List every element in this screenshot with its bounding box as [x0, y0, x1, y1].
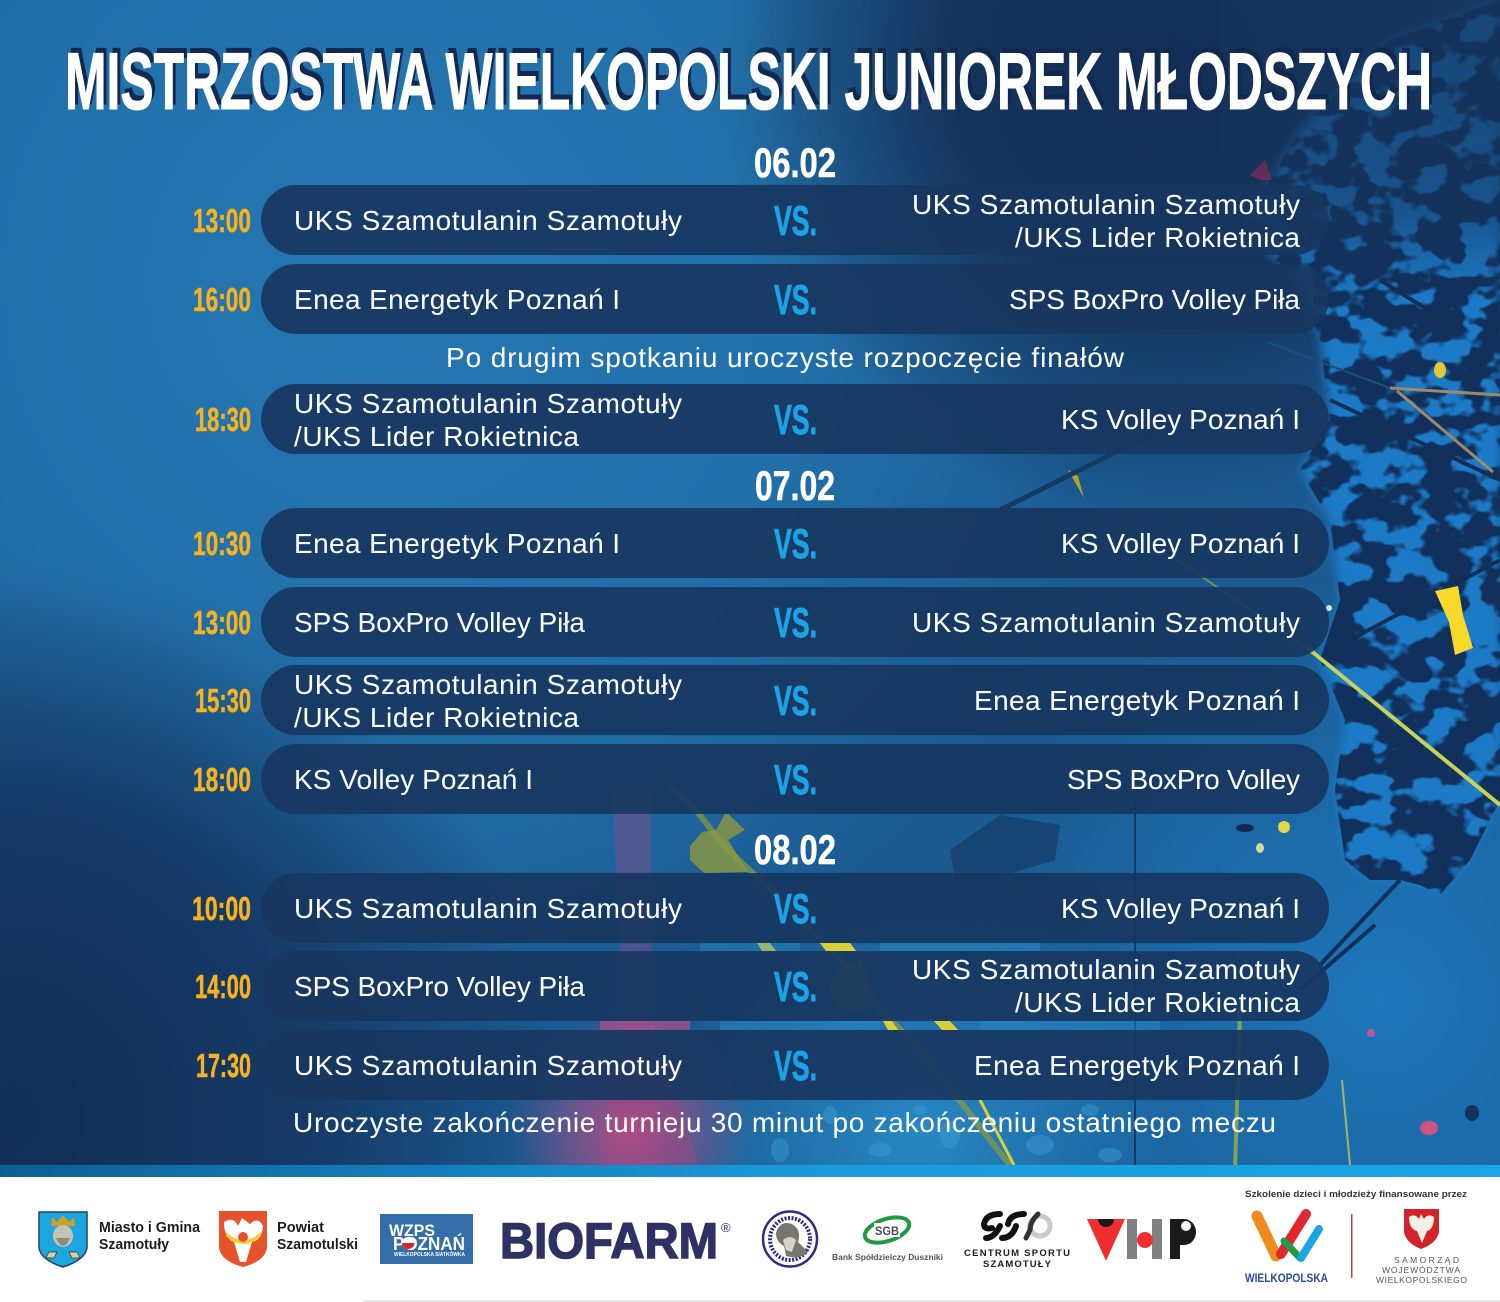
- footer sponsor band: [0, 1165, 1500, 1302]
- logo: Centrum Sportu Szamotuły: CENTRUM SPORTU: [964, 1248, 1070, 1259]
- date heading 06.02: 06.02: [754, 139, 836, 186]
- match row: 06.02 13:00: UKS Szamotulanin Szamotuły: [912, 189, 1300, 220]
- logo: VHP: [1087, 1219, 1196, 1261]
- logo: Miasto i Gmina Szamotuły: Szamotuły: [99, 1237, 169, 1253]
- date heading 08.02: 08.02: [754, 826, 836, 873]
- logo: WZPS Poznań: WZPS: [389, 1221, 435, 1240]
- logo: Samorząd Województwa Wielkopolskiego: [1351, 1209, 1467, 1285]
- logo: Biofarm: BIOFARM: [500, 1213, 718, 1269]
- match row: 07.02 18:00: KS Volley Poznań I: [294, 764, 533, 795]
- match row: 06.02 18:30: 18:30: [195, 401, 251, 438]
- match row: 06.02 13:00: [193, 185, 1329, 255]
- logo: WZPS Poznań: [380, 1214, 473, 1264]
- match row: 06.02 16:00: SPS BoxPro Volley Piła: [1009, 284, 1300, 315]
- logo: Biofarm: ®: [721, 1220, 731, 1235]
- match row: 08.02 17:30: 17:30: [196, 1047, 251, 1084]
- match row: 06.02 16:00: [193, 264, 1329, 334]
- match row: 07.02 15:30: VS.: [774, 677, 817, 724]
- match row: 07.02 10:30: VS.: [774, 520, 817, 567]
- match row: 07.02 10:30: [193, 508, 1329, 578]
- match row: 08.02 17:30: VS.: [774, 1042, 817, 1089]
- match row: 06.02 13:00: /UKS Lider Rokietnica: [1015, 222, 1300, 253]
- logo: Powiat Szamotulski: Powiat: [277, 1220, 324, 1236]
- match row: 07.02 15:30: Enea Energetyk Poznań I: [974, 685, 1300, 716]
- logo: Centrum Sportu Szamotuły: [964, 1214, 1070, 1270]
- logo: SGB Bank Spółdzielczy Duszniki: [832, 1212, 943, 1262]
- match row: 07.02 10:30: Enea Energetyk Poznań I: [294, 528, 620, 559]
- background: ink splatter on the right: [1177, 0, 1500, 990]
- match row: 06.02 18:30: VS.: [774, 396, 817, 443]
- match row: 08.02 10:00: VS.: [774, 885, 817, 932]
- logo: SGB Bank Spółdzielczy Duszniki: SGB: [875, 1224, 899, 1238]
- match row: 07.02 15:30: [195, 665, 1329, 735]
- match row: 06.02 13:00: UKS Szamotulanin Szamotuły: [294, 205, 682, 236]
- match row: 06.02 18:30: UKS Szamotulanin Szamotuły: [294, 388, 682, 419]
- match row: 07.02 13:00: UKS Szamotulanin Szamotuły: [912, 607, 1300, 638]
- match row: 07.02 13:00: [193, 587, 1329, 657]
- match row: 08.02 10:00: KS Volley Poznań I: [1061, 893, 1300, 924]
- logo: school medallion: [763, 1212, 817, 1266]
- logo: Wielkopolska: WIELKOPOLSKA: [1245, 1271, 1328, 1285]
- match row: 08.02 10:00: [192, 873, 1329, 943]
- match row: 07.02 18:00: SPS BoxPro Volley: [1067, 764, 1300, 795]
- match row: 07.02 18:00: [193, 744, 1329, 814]
- match row: 08.02 10:00: 10:00: [192, 890, 251, 927]
- match row: 08.02 10:00: UKS Szamotulanin Szamotuły: [294, 893, 682, 924]
- match row: 06.02 13:00: 13:00: [193, 202, 251, 239]
- logo: Miasto i Gmina Szamotuły: Miasto i Gmina: [99, 1220, 201, 1236]
- match row: 08.02 14:00: /UKS Lider Rokietnica: [1015, 987, 1300, 1018]
- logo: SGB Bank Spółdzielczy Duszniki: Bank Spółdzielczy Duszniki: [832, 1252, 943, 1262]
- match row: 08.02 14:00: [195, 951, 1329, 1021]
- match row: 08.02 14:00: SPS BoxPro Volley Piła: [294, 971, 585, 1002]
- logo: Wielkopolska: [1245, 1214, 1328, 1285]
- funding caption: Szkolenie dzieci i młodzieży finansowane przez: [1245, 1189, 1467, 1200]
- date heading 07.02: 07.02: [755, 462, 835, 509]
- note: closing ceremony: Uroczyste zakończenie turnieju 30 minut po zakończeniu ostatniego meczu: [293, 1107, 1276, 1138]
- match row: 08.02 14:00: VS.: [774, 963, 817, 1010]
- match row: 07.02 18:00: VS.: [774, 756, 817, 803]
- logo: Samorząd Województwa Wielkopolskiego: WOJEWÓDZTWA: [1382, 1265, 1460, 1275]
- match row: 08.02 17:30: UKS Szamotulanin Szamotuły: [294, 1050, 682, 1081]
- match row: 07.02 10:30: 10:30: [193, 525, 251, 562]
- match row: 06.02 18:30: KS Volley Poznań I: [1061, 404, 1300, 435]
- logo: Powiat Szamotulski: Szamotulski: [277, 1237, 358, 1253]
- note: opening ceremony: Po drugim spotkaniu uroczyste rozpoczęcie finałów: [446, 342, 1125, 373]
- match row: 07.02 13:00: SPS BoxPro Volley Piła: [294, 607, 585, 638]
- logo: Samorząd Województwa Wielkopolskiego: WIELKOPOLSKIEGO: [1376, 1275, 1467, 1285]
- match row: 07.02 15:30: UKS Szamotulanin Szamotuły: [294, 669, 682, 700]
- logo: Centrum Sportu Szamotuły: SZAMOTUŁY: [983, 1259, 1052, 1270]
- match row: 08.02 17:30: [196, 1030, 1329, 1100]
- match row: 07.02 18:00: 18:00: [193, 761, 251, 798]
- match row: 08.02 17:30: Enea Energetyk Poznań I: [974, 1050, 1300, 1081]
- logo: Powiat Szamotulski: [219, 1211, 358, 1267]
- match row: 08.02 14:00: 14:00: [195, 968, 251, 1005]
- match row: 07.02 13:00: 13:00: [193, 604, 251, 641]
- logo: Miasto i Gmina Szamotuły: [39, 1212, 201, 1267]
- match row: 06.02 18:30: [195, 384, 1329, 454]
- match row: 08.02 14:00: UKS Szamotulanin Szamotuły: [912, 954, 1300, 985]
- match row: 07.02 10:30: KS Volley Poznań I: [1061, 528, 1300, 559]
- logo: WZPS Poznań: POZNAŃ: [393, 1233, 465, 1254]
- match row: 07.02 15:30: 15:30: [195, 682, 251, 719]
- match row: 06.02 18:30: /UKS Lider Rokietnica: [294, 421, 579, 452]
- match row: 06.02 16:00: Enea Energetyk Poznań I: [294, 284, 620, 315]
- logo: Samorząd Województwa Wielkopolskiego: SAMORZĄD: [1394, 1255, 1459, 1265]
- match row: 06.02 16:00: 16:00: [193, 281, 251, 318]
- match row: 07.02 13:00: VS.: [774, 599, 817, 646]
- match row: 07.02 15:30: /UKS Lider Rokietnica: [294, 702, 579, 733]
- match row: 06.02 13:00: VS.: [774, 197, 817, 244]
- match row: 06.02 16:00: VS.: [774, 276, 817, 323]
- logo: WZPS Poznań: WIELKOPOLSKA SIATKÓWKA: [394, 1250, 465, 1258]
